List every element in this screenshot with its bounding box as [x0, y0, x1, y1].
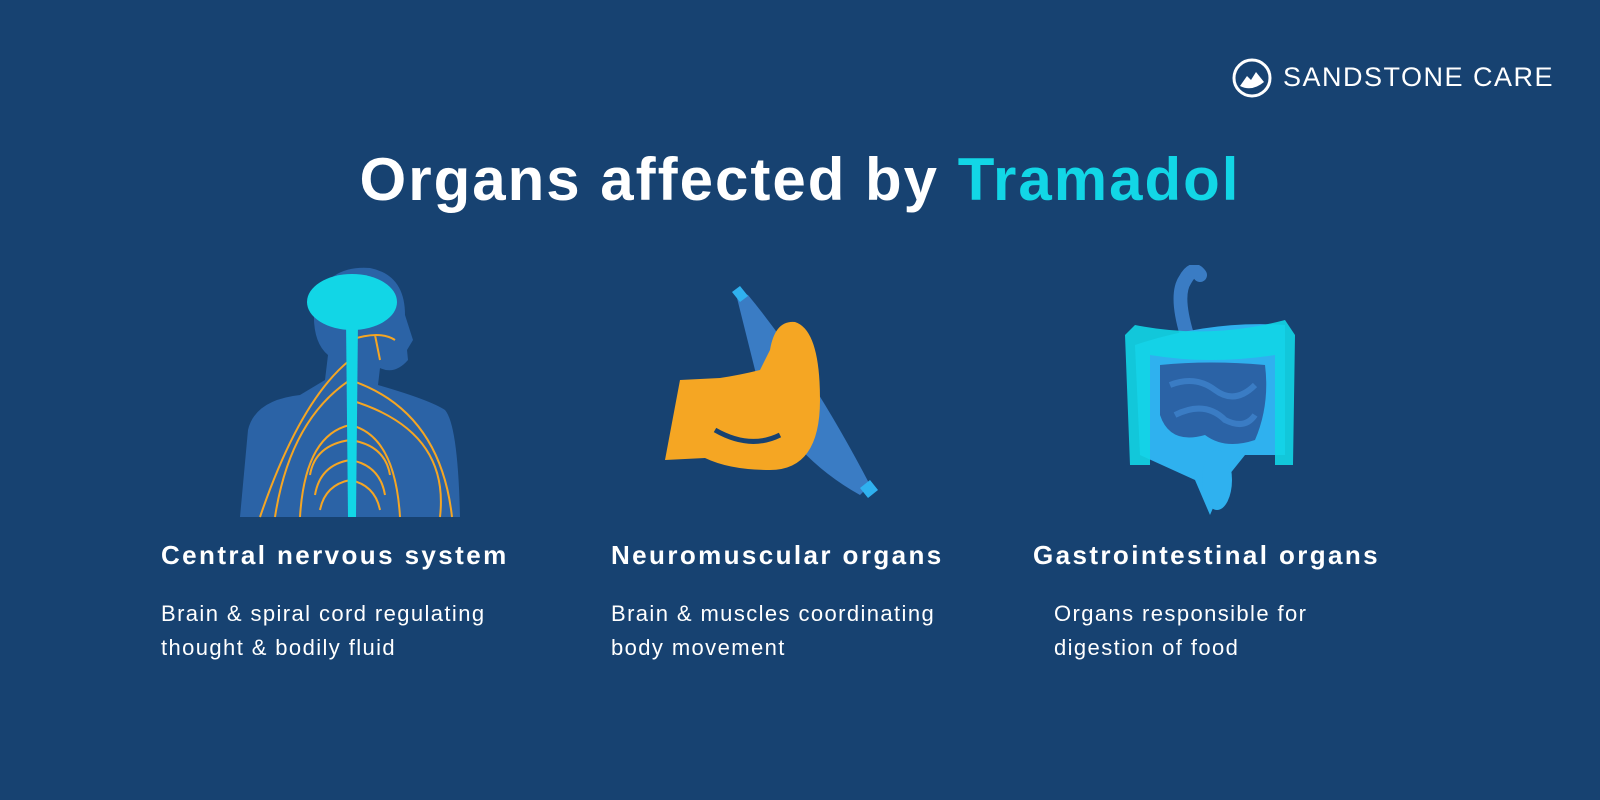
text: CNS: thought & bodily fluid [161, 635, 396, 660]
text: neuromuscular: body movement [611, 635, 786, 660]
title: Organs affected by Tramadol [360, 146, 1240, 213]
text: GI: digestion of food [1054, 635, 1239, 660]
icon: muscle [665, 286, 878, 498]
text: neuromuscular [611, 601, 935, 660]
text: neuromuscular: Brain & muscles coordinating [611, 601, 935, 626]
icon: intestines [1125, 265, 1295, 515]
logo [1232, 58, 1554, 98]
icon: nervous system [240, 268, 460, 518]
heading: GI: Gastrointestinal organs [1033, 540, 1380, 570]
text: GI: Organs responsible for [1054, 601, 1307, 626]
text: GI [1054, 601, 1307, 660]
heading: CNS: Central nervous system [161, 540, 509, 570]
logo: SANDSTONE CARE [1283, 62, 1554, 92]
text: CNS [161, 601, 485, 660]
text: CNS: Brain & spiral cord regulating [161, 601, 485, 626]
heading: neuromuscular: Neuromuscular organs [611, 540, 944, 570]
icon: logo mountain [1232, 58, 1272, 98]
